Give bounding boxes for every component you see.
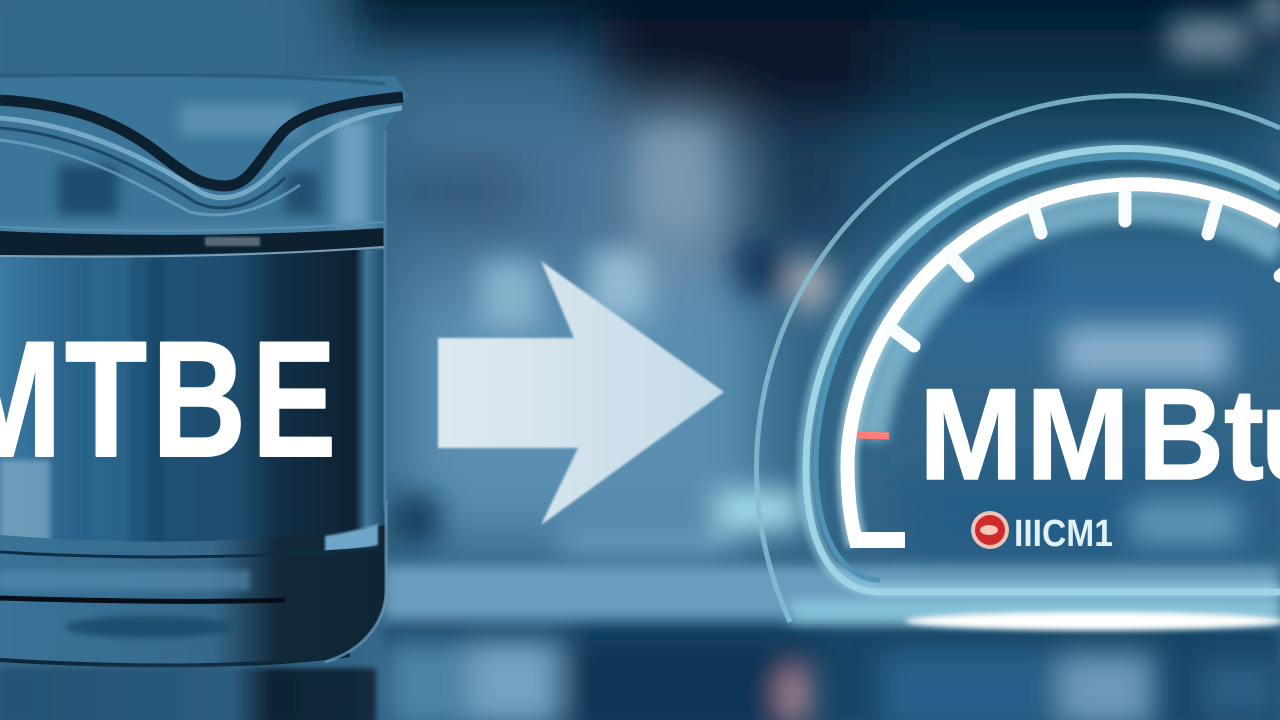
gauge — [757, 96, 1280, 622]
bottom glow line — [790, 600, 1280, 630]
water body — [0, 250, 386, 550]
small gauge caption: IIICM1 — [1014, 513, 1113, 555]
icon: red badge — [971, 511, 1009, 549]
beaker base — [0, 525, 386, 665]
arrow — [438, 261, 724, 525]
gauge red tick — [857, 435, 889, 436]
water surface — [0, 228, 384, 255]
label: MMBtu: M — [919, 361, 1023, 507]
beaker — [0, 75, 408, 720]
beaker spout rim — [0, 97, 403, 186]
label: MTBE: E — [252, 307, 336, 491]
label: MMBtu: M — [1026, 361, 1130, 507]
label: MTBE — [0, 342, 332, 457]
gauge ticks — [888, 195, 1280, 346]
gauge inner white arc — [847, 184, 1280, 545]
gauge middle frame — [805, 149, 1280, 592]
label: MMBtu: t — [1224, 361, 1264, 507]
beaker upper glass — [0, 76, 408, 236]
label: MMBtu: B — [1138, 361, 1224, 507]
label: MTBE: B — [152, 307, 246, 491]
label: MMBtu — [926, 388, 1280, 481]
horizontal light band — [384, 566, 1280, 720]
gauge bottom tick — [850, 532, 905, 548]
gauge outer thin arc — [757, 96, 1280, 622]
label: MTBE: T — [65, 307, 147, 491]
